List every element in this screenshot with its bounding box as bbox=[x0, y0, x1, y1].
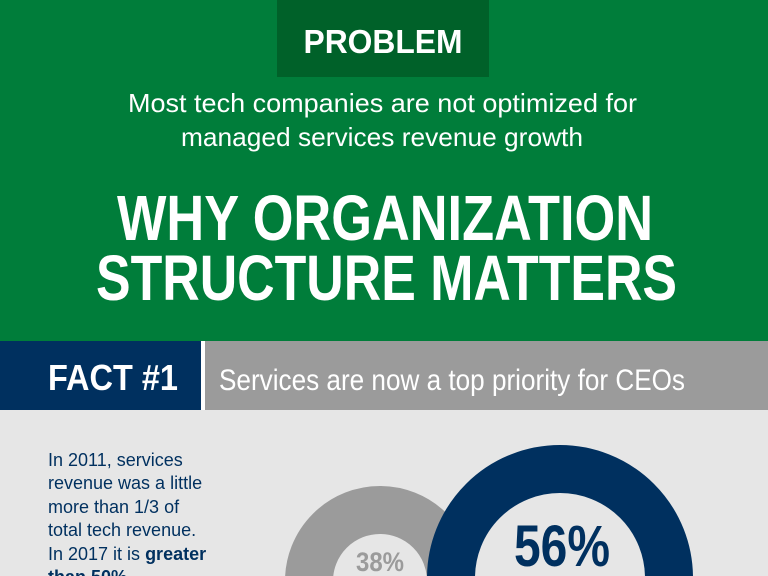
fact band bbox=[0, 341, 768, 410]
title: WHY ORGANIZATION bbox=[117, 182, 653, 254]
header panel bbox=[0, 0, 768, 341]
problem badge bbox=[277, 0, 489, 77]
problem badge: PROBLEM bbox=[304, 23, 462, 60]
chart: 38% ring bbox=[309, 510, 451, 576]
fact heading bbox=[205, 341, 768, 410]
subtitle: Most tech companies are not optimized for bbox=[128, 88, 637, 118]
subtitle bbox=[128, 88, 637, 152]
title bbox=[96, 182, 677, 314]
text block: more than 1/3 of bbox=[48, 497, 180, 517]
fact heading: Services are now a top priority for CEOs bbox=[219, 364, 685, 397]
subtitle: managed services revenue growth bbox=[181, 122, 583, 152]
text block: In 2011, services bbox=[48, 450, 183, 470]
text block: total tech revenue. bbox=[48, 520, 196, 540]
chart: 56% ring bbox=[451, 469, 669, 576]
fact label bbox=[0, 341, 201, 410]
fact label: FACT #1 bbox=[48, 357, 178, 398]
text block: In 2017 it is greater bbox=[48, 544, 206, 564]
content panel bbox=[0, 410, 768, 576]
text block: revenue was a little bbox=[48, 473, 202, 493]
text block bbox=[48, 450, 206, 576]
